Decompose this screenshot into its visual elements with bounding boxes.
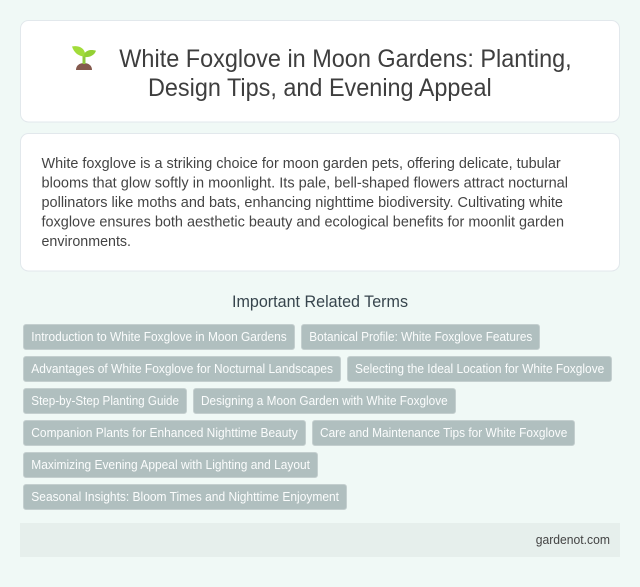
chip: care (312, 420, 574, 446)
title: White Foxglove in Moon Gardens: Planting, (119, 45, 572, 73)
chip: designing (194, 388, 456, 414)
chip: selecting location (348, 356, 612, 382)
chip: introduction: Introduction to White Foxglove in Moon Gardens (31, 330, 287, 344)
heading: related terms: Important Related Terms (232, 293, 408, 311)
chip: botanical profile (302, 324, 540, 350)
text block: description: blooms that glow softly in moonlight. Its pale, bell-shaped flowers attract nocturnal (42, 174, 568, 192)
chip: evening appeal (24, 452, 318, 478)
chip: companion plants (24, 420, 306, 446)
text block: description (42, 155, 568, 250)
panel: related term chips (24, 324, 612, 510)
chip: evening appeal: Maximizing Evening Appeal with Lighting and Layout (31, 458, 310, 472)
chip: companion plants: Companion Plants for Enhanced Nighttime Beauty (31, 426, 298, 440)
panel: title card (20, 20, 620, 122)
text block: description: White foxglove is a striking choice for moon garden pets, offering delicate, tubular (42, 155, 561, 172)
panel: description card (20, 134, 620, 271)
chip: designing: Designing a Moon Garden with White Foxglove (201, 394, 448, 408)
footer (20, 523, 620, 557)
chip: planting guide: Step-by-Step Planting Guide (31, 394, 179, 408)
title (119, 45, 572, 102)
footer: gardenot.com (536, 533, 610, 547)
text block: description: pollinators like moths and bats, enhancing nighttime biodiversity. Cultivating white (42, 194, 563, 211)
chip: planting guide (24, 388, 186, 414)
chip: seasonal insights (24, 484, 346, 510)
chip: botanical profile: Botanical Profile: White Foxglove Features (309, 330, 532, 344)
text block: description: foxglove ensures both aesthetic beauty and ecological benefits for moonlit garden (42, 214, 564, 230)
chip: seasonal insights: Seasonal Insights: Bloom Times and Nighttime Enjoyment (31, 490, 339, 504)
chip: introduction (24, 324, 294, 350)
text block: description: environments. (42, 233, 131, 250)
chip: advantages: Advantages of White Foxglove for Nocturnal Landscapes (31, 362, 333, 376)
chip: care: Care and Maintenance Tips for White Foxglove (320, 426, 567, 440)
chip: selecting location: Selecting the Ideal Location for White Foxglove (355, 362, 604, 376)
title: Design Tips, and Evening Appeal (148, 74, 492, 102)
chip: advantages (24, 356, 340, 382)
icon: sprout (72, 46, 96, 70)
